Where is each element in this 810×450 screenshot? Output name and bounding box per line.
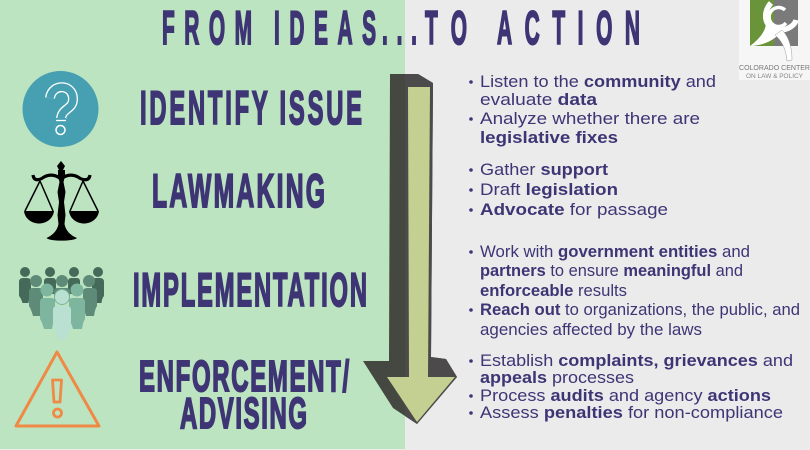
- icon: group of people: [19, 267, 104, 340]
- text block: implementation bullets: [469, 242, 800, 339]
- text block: enforcement bullets: appeals processes: [480, 368, 634, 387]
- title: IDEAS: [274, 1, 376, 54]
- text block: enforcement bullets: Assess penalties for non-compliance: [480, 403, 783, 422]
- title: FROM: [162, 1, 252, 54]
- title: TO: [425, 1, 467, 54]
- text block: identify issue bullets: Analyze whether there are: [480, 109, 700, 128]
- text block: enforcement bullets: [469, 351, 793, 422]
- text block: implementation bullets: Work with government entities and: [480, 242, 750, 261]
- logo: Colorado Center on Law & Policy: COLORADO CENTER: [739, 65, 810, 72]
- logo: Colorado Center on Law & Policy: ON LAW & POLICY: [746, 73, 804, 80]
- text block: implementation bullets: enforceable results: [480, 281, 627, 300]
- icon: question mark: [22, 71, 98, 147]
- icon: warning triangle: [16, 352, 99, 426]
- text block: lawmaking bullets: Advocate for passage: [480, 200, 668, 219]
- heading: enforcement / advising: ADVISING: [180, 390, 307, 438]
- panel: left green background: [0, 0, 405, 449]
- text block: identify issue bullets: Listen to the community and: [480, 72, 716, 91]
- title: ACTION: [497, 1, 640, 54]
- text block: identify issue bullets: legislative fixes: [480, 128, 618, 147]
- text block: enforcement bullets: Establish complaints, grievances and: [480, 351, 793, 370]
- panel: right grey background: [405, 0, 810, 449]
- text block: enforcement bullets: Process audits and agency actions: [480, 386, 771, 405]
- icon: scales of justice: [24, 161, 99, 241]
- text block: implementation bullets: Reach out to organizations, the public, and: [480, 300, 800, 319]
- text block: lawmaking bullets: Gather support: [480, 160, 608, 179]
- text block: identify issue bullets: evaluate data: [480, 90, 598, 109]
- heading: lawmaking: LAWMAKING: [152, 166, 325, 218]
- text block: lawmaking bullets: Draft legislation: [480, 180, 618, 199]
- title: ...: [382, 1, 417, 54]
- arrow: downward process arrow: [363, 74, 457, 424]
- text block: identify issue bullets: [469, 72, 716, 147]
- title: [162, 1, 640, 54]
- heading: enforcement / advising: [139, 353, 349, 438]
- heading: enforcement / advising: ENFORCEMENT/: [139, 353, 349, 401]
- heading: identify issue: IDENTIFY ISSUE: [140, 81, 362, 134]
- text block: implementation bullets: agencies affected by the laws: [480, 320, 702, 339]
- text block: lawmaking bullets: [469, 160, 668, 219]
- heading: implementation: IMPLEMENTATION: [133, 263, 367, 316]
- text block: implementation bullets: partners to ensure meaningful and: [480, 261, 743, 280]
- logo: Colorado Center on Law & Policy: [739, 0, 810, 80]
